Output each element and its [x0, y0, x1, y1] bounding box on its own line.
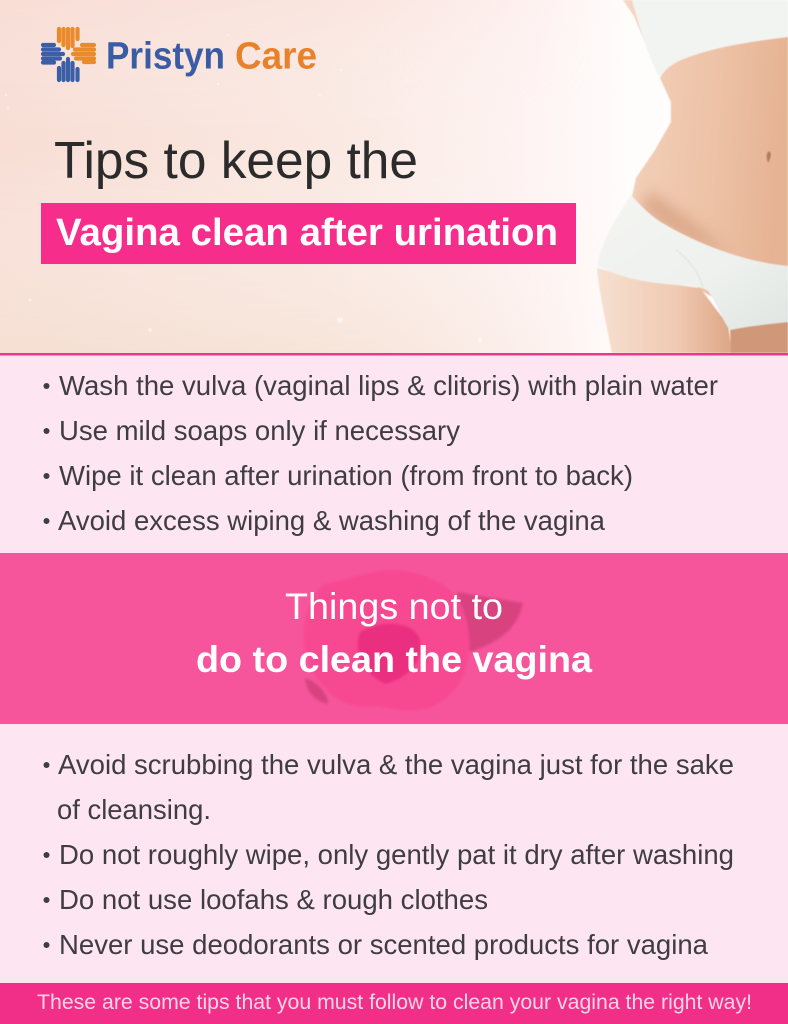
- list item 1: Avoid scrubbing the vulva & the vagina just for the sake: [58, 749, 734, 780]
- list item 1: [44, 749, 734, 825]
- list item 1: of cleansing.: [57, 794, 211, 825]
- panties: [597, 195, 788, 330]
- navel: [767, 151, 771, 163]
- list item 4: Never use deodorants or scented products for vagina: [59, 929, 708, 960]
- rose image: [304, 570, 523, 711]
- heading banner: Vagina clean after urination: [56, 212, 558, 254]
- heading: tips: Tips to keep the: [54, 132, 418, 190]
- footer bar: [0, 983, 788, 1024]
- list item 1: Wash the vulva (vaginal lips & clitoris) with plain water: [59, 370, 718, 401]
- panel: things not to do: [0, 553, 788, 724]
- list item 2: Do not roughly wipe, only gently pat it dry after washing: [59, 839, 734, 870]
- logo: [43, 29, 317, 80]
- panel: don't list: [0, 724, 788, 983]
- list item 4: Avoid excess wiping & washing of the vagina: [58, 505, 605, 536]
- top: [632, 0, 788, 79]
- logo: Care: [235, 36, 317, 78]
- hero bokeh: [5, 34, 482, 342]
- footer bar: These are some tips that you must follow to clean your vagina the right way!: [37, 991, 752, 1014]
- hero background: [0, 0, 788, 353]
- photo: torso: [597, 0, 788, 353]
- panel title: [196, 586, 592, 680]
- heading banner: [41, 203, 576, 264]
- list item 3: Do not use loofahs & rough clothes: [59, 884, 488, 915]
- leg left: [597, 268, 732, 353]
- list item 2: Use mild soaps only if necessary: [59, 415, 460, 446]
- leg right: [730, 320, 788, 353]
- panel title: do to clean the vagina: [196, 639, 592, 680]
- logo text: Pristyn: [106, 36, 225, 78]
- panel title: Things not to: [285, 586, 503, 627]
- list item 3: Wipe it clean after urination (from front to back): [59, 460, 633, 491]
- panel: do list: [0, 353, 788, 553]
- icon: logo cross: [43, 29, 94, 80]
